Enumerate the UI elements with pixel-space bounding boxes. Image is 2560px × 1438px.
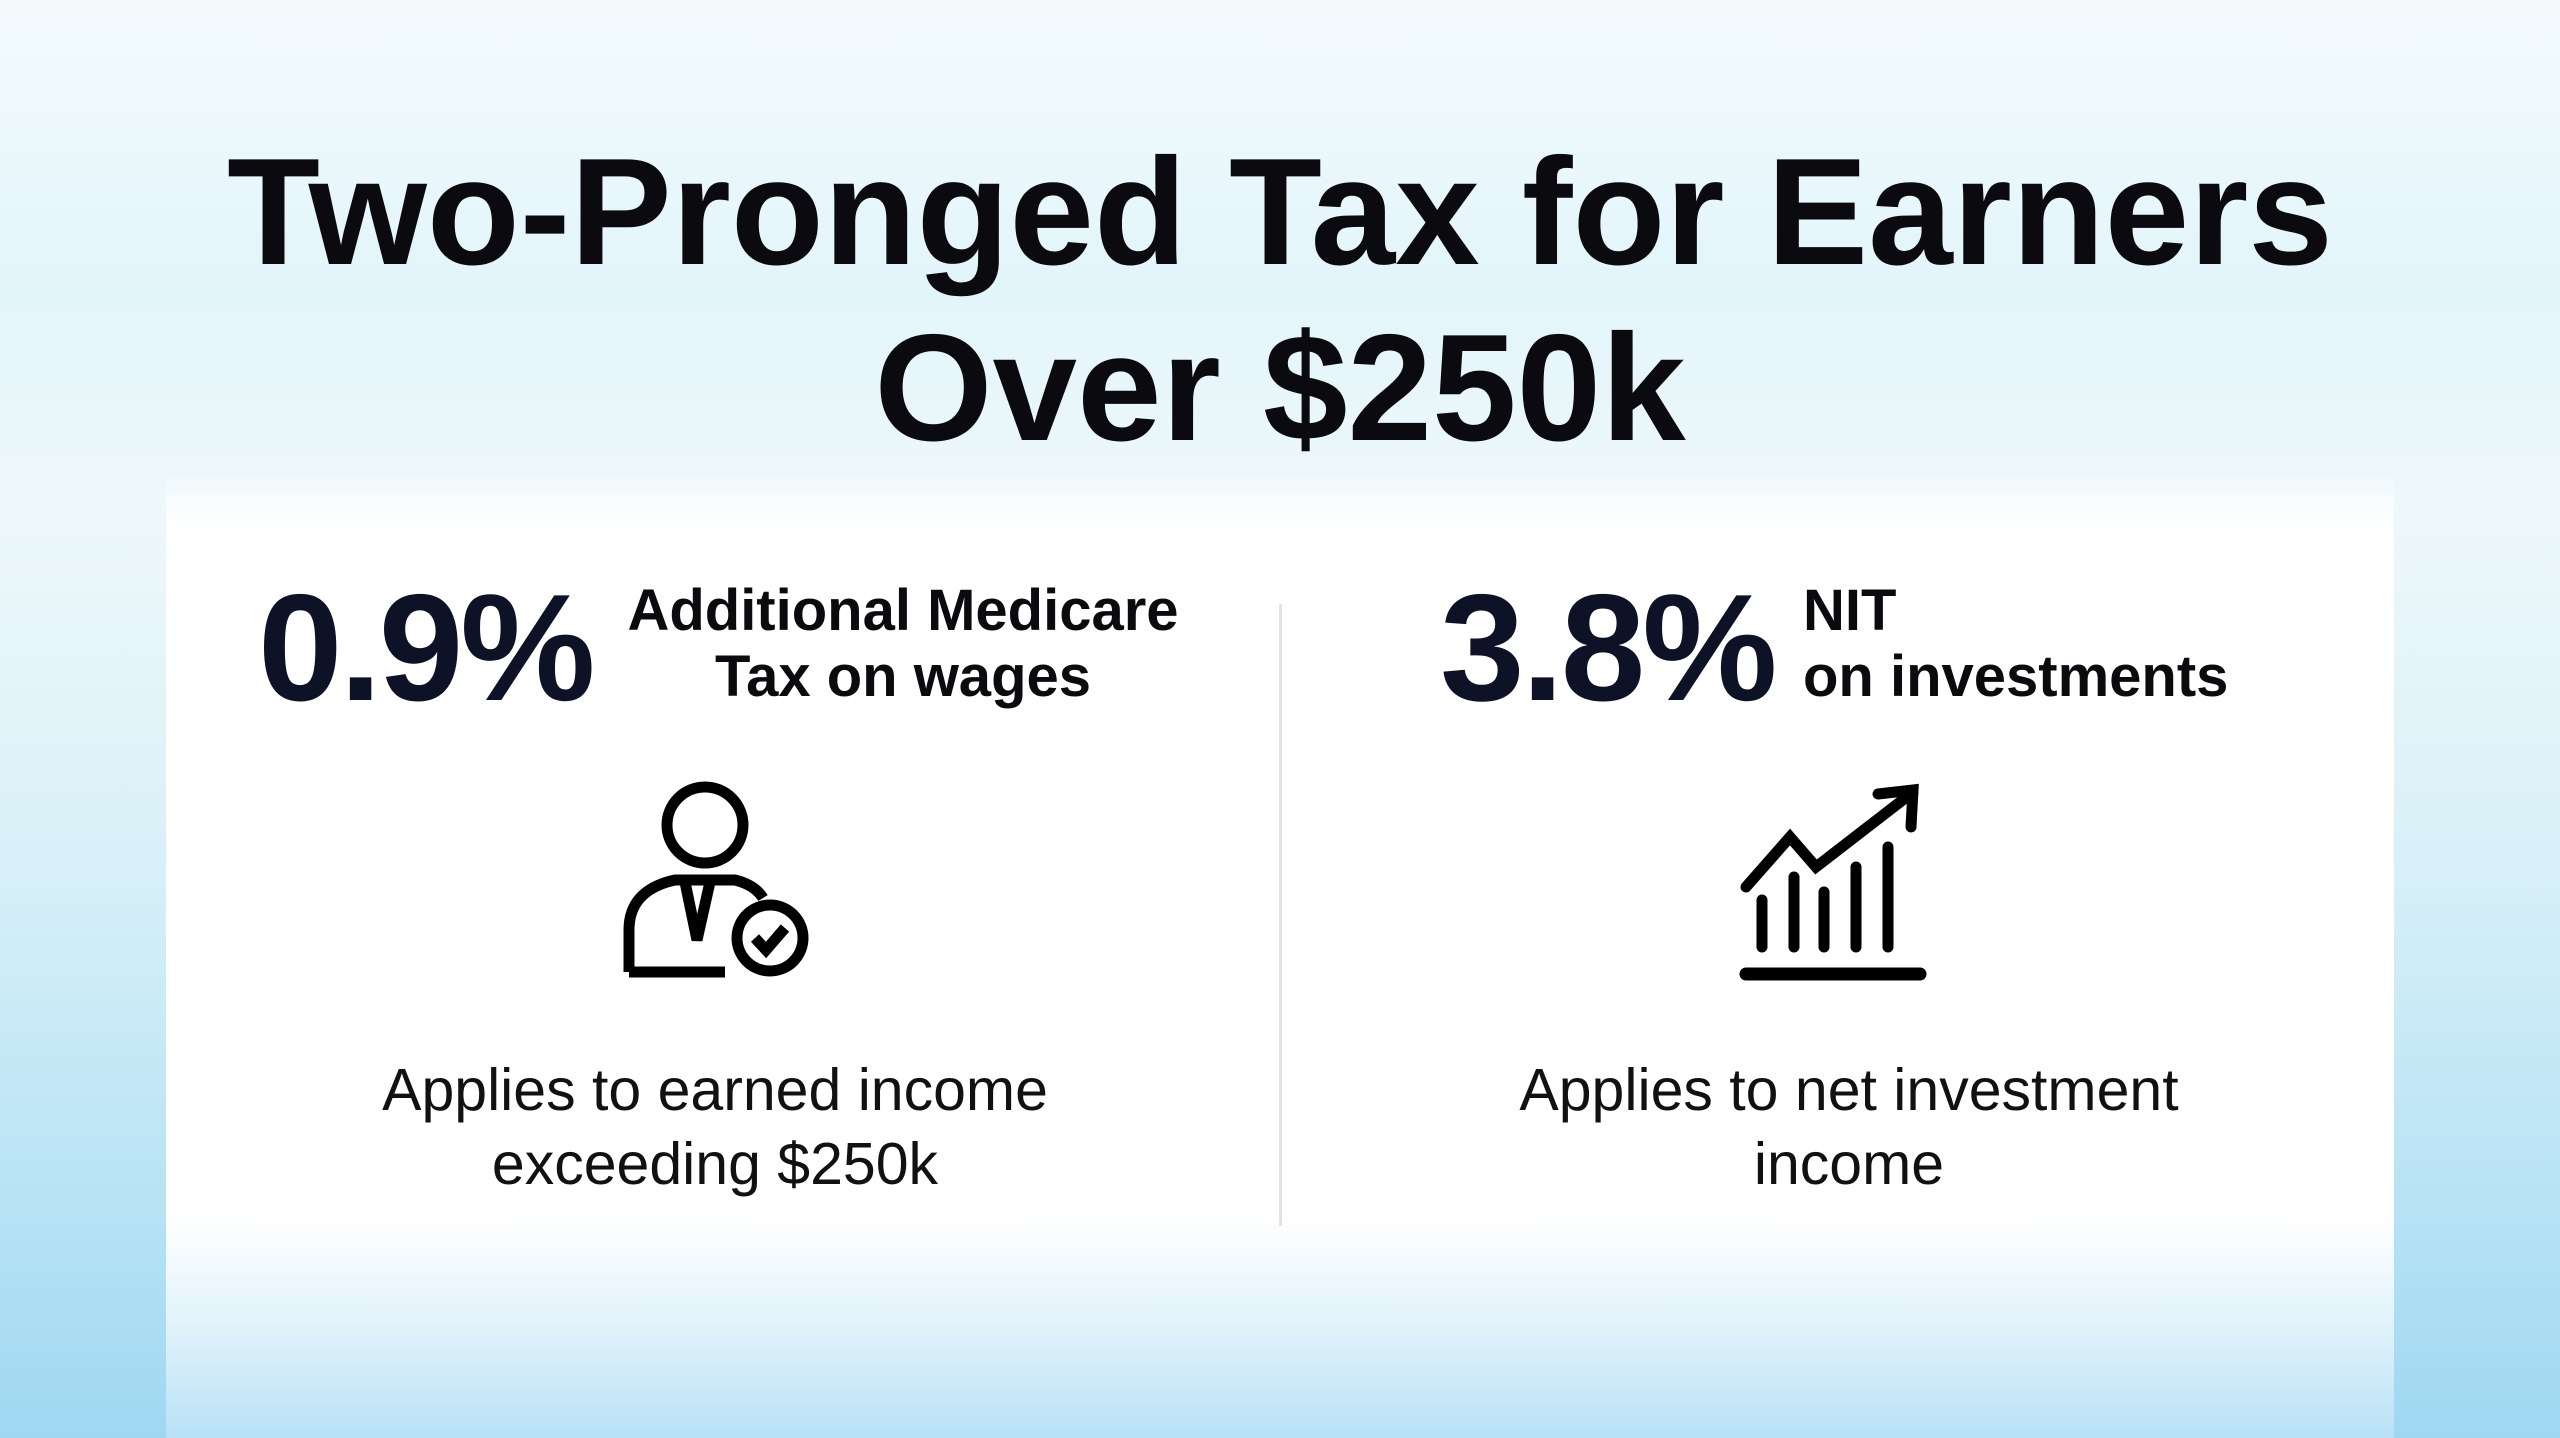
- title: Over $250k: [874, 303, 1686, 473]
- title: [227, 127, 2333, 473]
- panel: white content card: [166, 470, 2394, 1438]
- icon: person with check: [624, 782, 808, 978]
- label: Additional Medicare Tax: Tax on wages: [715, 644, 1091, 709]
- text: applies earned income: Applies to earned income: [382, 1057, 1048, 1123]
- label: Additional Medicare Tax: [627, 578, 1179, 709]
- title: Two-Pronged Tax for Earners: [227, 127, 2333, 297]
- label: NIT: [1803, 578, 2228, 709]
- text: applies net investment: [1519, 1057, 2179, 1197]
- text: applies earned income: exceeding $250k: [492, 1131, 938, 1197]
- text: applies net investment: income: [1754, 1131, 1944, 1197]
- text: applies net investment: Applies to net investment: [1519, 1057, 2179, 1123]
- text: applies earned income: [382, 1057, 1048, 1197]
- icon: bar chart with arrow: [1740, 784, 1926, 980]
- label: NIT: on investments: [1803, 644, 2228, 709]
- divider: [1279, 604, 1282, 1226]
- label: NIT: NIT: [1803, 578, 1896, 643]
- label: Additional Medicare Tax: Additional Medicare: [627, 578, 1179, 643]
- stat: 0.9%: 0.9%: [258, 563, 592, 733]
- stat: 3.8%: 3.8%: [1440, 563, 1774, 733]
